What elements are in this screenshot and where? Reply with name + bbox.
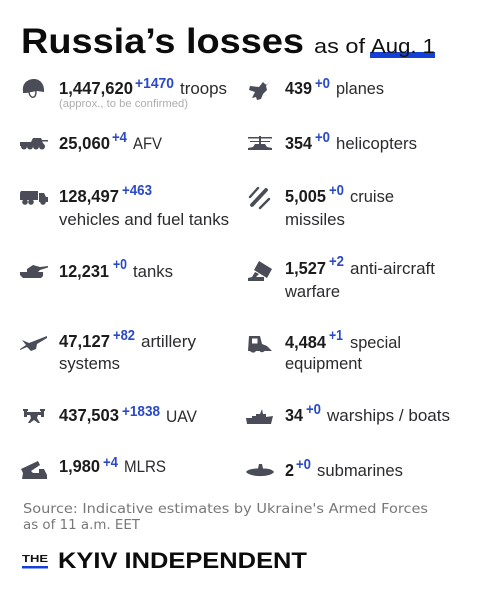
row: MLRS: [21, 455, 166, 479]
row: cruise missiles: 5,005: [285, 186, 326, 206]
logo: The Kyiv Independent: THE: [22, 553, 48, 565]
row: artillery systems: artillery: [141, 332, 196, 351]
row: AFV: [20, 130, 163, 153]
row: helicopters: helicopters: [336, 134, 417, 153]
row: submarines: [246, 457, 403, 480]
row: anti-aircraft warfare: +2: [329, 254, 344, 270]
row: tanks: +0: [113, 257, 127, 273]
row: AFV: AFV: [133, 134, 163, 153]
icon: loader: [248, 336, 272, 351]
row: helicopters: +0: [315, 130, 330, 146]
icon: truck: [20, 191, 48, 202]
row: vehicles and fuel tanks: +463: [122, 183, 152, 199]
row: vehicles and fuel tanks: 128,497: [59, 186, 119, 206]
row: warships: +0: [306, 402, 321, 418]
row: cruise missiles: missiles: [285, 210, 345, 229]
icon: drone: [23, 409, 45, 423]
row: MLRS: MLRS: [124, 457, 166, 476]
row: troops: [23, 76, 227, 110]
row: vehicles and fuel tanks: [20, 183, 229, 229]
row: UAV: 437,503: [59, 405, 119, 425]
row: anti-aircraft warfare: anti-aircraft: [350, 259, 435, 278]
icon: warship: [246, 409, 273, 424]
row: anti-aircraft warfare: warfare: [284, 282, 340, 301]
row: artillery systems: systems: [59, 354, 120, 373]
row: AFV: 25,060: [59, 133, 110, 153]
row: special equipment: equipment: [285, 354, 362, 373]
icon: missiles: [250, 188, 269, 208]
row: UAV: UAV: [166, 407, 198, 426]
row: troops: (approx., to be confirmed): [59, 98, 188, 110]
row: anti-aircraft warfare: 1,527: [285, 258, 326, 278]
source note: as of 11 a.m. EET: [23, 517, 141, 533]
row: helicopters: [248, 130, 417, 153]
row: artillery systems: 47,127: [59, 331, 110, 351]
row: troops: 1,447,620: [59, 78, 133, 98]
icon: helicopter: [248, 136, 272, 144]
source note: [23, 501, 428, 533]
row: tanks: [20, 257, 173, 281]
row: special equipment: [248, 328, 401, 373]
row: UAV: +1838: [122, 404, 160, 420]
row: tanks: 12,231: [59, 261, 109, 281]
row: cruise missiles: cruise: [350, 187, 394, 206]
row: artillery systems: +82: [113, 328, 135, 344]
row: special equipment: 4,484: [285, 332, 326, 352]
icon: helmet: [23, 79, 44, 93]
row: helicopters: 354: [285, 133, 312, 153]
row: vehicles and fuel tanks: vehicles and fuel tanks: [59, 210, 229, 229]
title: as of: [314, 36, 366, 58]
row: warships: 34: [285, 405, 303, 425]
source note: Source: Indicative estimates by Ukraine's Armed Forces: [23, 501, 428, 517]
row: MLRS: 1,980: [59, 456, 100, 476]
row: cruise missiles: [250, 183, 394, 229]
row: special equipment: special: [350, 333, 401, 352]
row: planes: +0: [315, 76, 330, 92]
row: planes: [249, 76, 384, 100]
row: special equipment: +1: [329, 328, 343, 344]
title: Aug. 1: [371, 36, 435, 58]
title: Russia’s losses: [21, 22, 304, 61]
row: troops: +1470: [135, 76, 174, 92]
title: [21, 22, 435, 61]
icon: submarine: [246, 464, 274, 476]
icon: armoured vehicle: [20, 138, 48, 146]
row: warships: warships / boats: [326, 406, 450, 425]
icon: artillery: [20, 336, 47, 351]
row: anti-aircraft warfare: [248, 254, 435, 301]
row: submarines: +0: [296, 457, 311, 473]
row: troops: troops: [180, 79, 227, 98]
icon: plane: [249, 79, 271, 100]
row: tanks: tanks: [133, 262, 173, 281]
row: planes: planes: [336, 79, 384, 98]
row: MLRS: +4: [103, 455, 118, 471]
icon: anti-aircraft launcher: [254, 261, 272, 278]
icon: tank: [20, 265, 48, 278]
row: cruise missiles: +0: [329, 183, 344, 199]
row: AFV: +4: [112, 130, 127, 146]
row: planes: 439: [285, 78, 312, 98]
row: submarines: 2: [285, 460, 294, 480]
row: warships: [246, 402, 450, 425]
logo: The Kyiv Independent: KYIV INDEPENDENT: [58, 548, 308, 573]
row: artillery systems: [20, 328, 196, 373]
icon: rocket launcher: [21, 461, 47, 479]
row: submarines: submarines: [317, 461, 403, 480]
row: UAV: [23, 404, 198, 426]
